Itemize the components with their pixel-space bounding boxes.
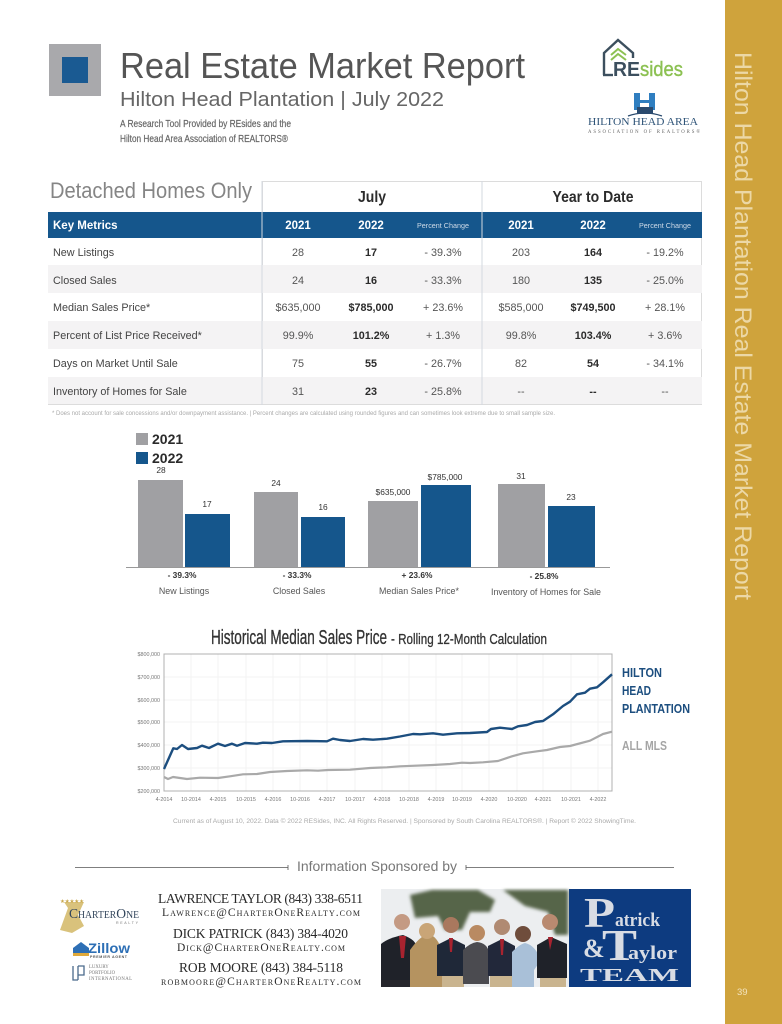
row: Percent of List Price Received: + 1.3% bbox=[426, 330, 460, 342]
group: Inventory: Inventory of Homes for Sale bbox=[491, 587, 601, 597]
group: Closed Sales bbox=[254, 478, 345, 596]
group: New Listings: 17 bbox=[202, 499, 212, 509]
contact: Lawrence Taylor: LAWRENCE TAYLOR (843) 338-6511 bbox=[158, 891, 363, 906]
logo: Hilton Head Area: ASSOCIATION OF REALTORS® bbox=[588, 129, 700, 135]
people bbox=[381, 914, 567, 987]
group: New Listings: 28 bbox=[156, 465, 166, 475]
row: New Listings: 164 bbox=[584, 247, 602, 259]
logo: CharterOne bbox=[60, 898, 139, 933]
x axis labels: 4-2019 bbox=[428, 797, 444, 803]
group headers: Year to Date bbox=[552, 189, 634, 206]
x axis labels: 4-2018 bbox=[374, 797, 390, 803]
row: Days on Market: 82 bbox=[515, 358, 527, 370]
row: Median Sales Price: $635,000 bbox=[275, 302, 321, 314]
team name panel: P bbox=[584, 891, 615, 937]
group headers: July bbox=[358, 189, 386, 206]
logo: CharterOne: ★★★★★ bbox=[60, 898, 84, 905]
group: Inventory: - 25.8% bbox=[530, 571, 559, 581]
y axis labels: $200,000 bbox=[138, 789, 160, 795]
group: Closed Sales: 16 bbox=[318, 502, 328, 512]
row: Closed Sales: 16 bbox=[365, 275, 377, 287]
team name panel bbox=[569, 889, 691, 987]
x axis labels: 4-2015 bbox=[210, 797, 226, 803]
group: Inventory: 31 bbox=[516, 471, 526, 481]
team name panel: & bbox=[583, 934, 605, 963]
x axis labels: 10-2021 bbox=[561, 797, 581, 803]
row: Inventory: 31 bbox=[292, 386, 304, 398]
team name panel: TEAM bbox=[580, 965, 679, 985]
row: Median Sales Price: $749,500 bbox=[570, 302, 616, 314]
row: Median Sales Price: Median Sales Price* bbox=[53, 302, 151, 314]
y axis labels: $500,000 bbox=[138, 720, 160, 726]
group: Median Sales Price: $785,000 bbox=[428, 472, 463, 482]
row: Inventory: 23 bbox=[365, 386, 377, 398]
header row: 2022 bbox=[358, 220, 384, 232]
row: New Listings: - 39.3% bbox=[424, 247, 462, 259]
row: Percent of List Price Received: + 3.6% bbox=[648, 330, 682, 342]
row: Closed Sales: Closed Sales bbox=[53, 275, 117, 287]
row: Percent of List Price Received: 99.8% bbox=[506, 330, 537, 342]
contact details bbox=[158, 891, 363, 988]
group: Inventory: 23 bbox=[566, 492, 576, 502]
x axis labels: 4-2014 bbox=[156, 797, 172, 803]
group: Closed Sales: 24 bbox=[271, 478, 281, 488]
line chart: historical median sales price bbox=[138, 652, 612, 803]
sidebar vertical title: Hilton Head Plantation Real Estate Market Report bbox=[729, 52, 756, 600]
row: Days on Market: - 26.7% bbox=[424, 358, 462, 370]
logo: Zillow: Zillow bbox=[88, 940, 130, 956]
contact: Rob Moore: ROB MOORE (843) 384-5118 bbox=[179, 960, 343, 975]
header row bbox=[53, 220, 691, 232]
legend label: Hilton Head Plantation bbox=[622, 666, 690, 716]
row: Percent of List Price Received: 99.9% bbox=[283, 330, 314, 342]
contact: Dick Patrick bbox=[173, 926, 348, 954]
group: Closed Sales: - 33.3% bbox=[283, 570, 312, 580]
intro text bbox=[120, 118, 291, 145]
table footnote: * Does not account for sale concessions and/or downpayment assistance. | Percent changes are calculated using rounded figures and can sometimes look extreme due to small sample size. bbox=[52, 410, 555, 417]
row: New Listings: 17 bbox=[365, 247, 377, 259]
logo: Luxury Portfolio International: INTERNATIONAL bbox=[89, 977, 132, 982]
logo: REsides: RE bbox=[613, 59, 640, 81]
row: New Listings: 203 bbox=[512, 247, 530, 259]
group: Median Sales Price: + 23.6% bbox=[402, 570, 433, 580]
header row: 2022 bbox=[580, 220, 606, 232]
x axis labels: 4-2020 bbox=[481, 797, 497, 803]
x axis labels: 10-2016 bbox=[290, 797, 310, 803]
line: All MLS bbox=[164, 732, 612, 779]
row: New Listings: New Listings bbox=[53, 247, 115, 259]
row: New Listings bbox=[53, 247, 684, 259]
group: Median Sales Price: $635,000 bbox=[376, 487, 411, 497]
row: Closed Sales: - 25.0% bbox=[646, 275, 684, 287]
legend label: Hilton Head Plantation: HEAD bbox=[622, 684, 651, 698]
team name panel: T bbox=[602, 921, 637, 970]
contact: Lawrence Taylor bbox=[158, 891, 363, 919]
y axis labels: $400,000 bbox=[138, 743, 160, 749]
legend label: All MLS: ALL MLS bbox=[622, 739, 667, 753]
logo: Hilton Head Area: HILTON HEAD AREA bbox=[588, 117, 699, 128]
row: Days on Market: 54 bbox=[587, 358, 599, 370]
row: Inventory: -- bbox=[661, 386, 669, 398]
row: Inventory: Inventory of Homes for Sale bbox=[53, 386, 187, 398]
subtitle: Hilton Head Plantation | July 2022 bbox=[120, 88, 444, 111]
row: Percent of List Price Received: Percent of List Price Received* bbox=[53, 330, 203, 342]
bar chart bbox=[126, 431, 610, 597]
contact: Dick Patrick: Dick@CharterOneRealty.com bbox=[177, 942, 345, 954]
x axis labels: 4-2022 bbox=[590, 797, 606, 803]
line: Hilton Head Plantation bbox=[164, 674, 612, 769]
legend: 2022 bbox=[152, 450, 183, 466]
icon: report square bbox=[49, 44, 101, 96]
contact: Rob Moore: robmoore@CharterOneRealty.com bbox=[161, 976, 361, 988]
title: Real Estate Market Report bbox=[120, 45, 525, 86]
row: Inventory: -- bbox=[517, 386, 525, 398]
group headers bbox=[358, 189, 634, 206]
row: Days on Market bbox=[53, 358, 684, 370]
x axis labels: 10-2019 bbox=[452, 797, 472, 803]
intro text: A Research Tool Provided by REsides and the bbox=[120, 118, 291, 130]
logo: Hilton Head Area bbox=[588, 93, 700, 135]
row: Inventory: -- bbox=[589, 386, 597, 398]
row: Closed Sales: 180 bbox=[512, 275, 530, 287]
legend label: Hilton Head Plantation: PLANTATION bbox=[622, 702, 690, 716]
team name panel: aylor bbox=[628, 943, 678, 964]
row: Closed Sales: - 33.3% bbox=[424, 275, 462, 287]
x axis labels: 10-2020 bbox=[507, 797, 527, 803]
group: New Listings: New Listings bbox=[159, 586, 210, 596]
palm trees bbox=[410, 890, 568, 935]
team name panel: atrick bbox=[615, 910, 660, 931]
row: Days on Market: Days on Market Until Sale bbox=[53, 358, 178, 370]
logo: Zillow: PREMIER AGENT bbox=[90, 955, 128, 959]
page number: 39 bbox=[737, 987, 748, 998]
contact: Rob Moore bbox=[161, 960, 361, 988]
row: Median Sales Price: + 28.1% bbox=[645, 302, 685, 314]
line chart title: Historical Median Sales Price bbox=[211, 627, 387, 649]
row: New Listings: 28 bbox=[292, 247, 304, 259]
photo: team portrait bbox=[381, 889, 691, 987]
table: key metrics bbox=[48, 181, 702, 405]
chart source note: Current as of August 10, 2022. Data © 2022 RESides, INC. All Rights Reserved. | Sponsored by South Carolina REALTORS®. | Report © 2022 ShowingTime. bbox=[173, 817, 636, 825]
y axis labels: $800,000 bbox=[138, 652, 160, 658]
x axis labels: 4-2016 bbox=[265, 797, 281, 803]
x axis labels: 10-2015 bbox=[236, 797, 256, 803]
row: Percent of List Price Received bbox=[53, 330, 682, 342]
row: Closed Sales bbox=[53, 275, 684, 287]
contact: Lawrence Taylor: Lawrence@CharterOneRealty.com bbox=[162, 907, 360, 919]
sponsor heading: Information Sponsored by bbox=[297, 858, 457, 874]
logo: REsides: sides bbox=[640, 59, 683, 81]
group: Median Sales Price bbox=[368, 472, 471, 596]
header row: 2021 bbox=[285, 220, 311, 232]
logo: CharterOne: CharterOne bbox=[69, 907, 139, 922]
y axis labels: $700,000 bbox=[138, 675, 160, 681]
group: New Listings: - 39.3% bbox=[168, 570, 197, 580]
row: Days on Market: 75 bbox=[292, 358, 304, 370]
logo: Luxury Portfolio International bbox=[73, 965, 132, 982]
logo: Luxury Portfolio International: LUXURY bbox=[89, 965, 109, 970]
header row: 2021 bbox=[508, 220, 534, 232]
row: Median Sales Price bbox=[53, 302, 685, 314]
group: New Listings bbox=[138, 465, 230, 596]
row: Median Sales Price: + 23.6% bbox=[423, 302, 463, 314]
row: New Listings: - 19.2% bbox=[646, 247, 684, 259]
row: Inventory bbox=[53, 386, 669, 398]
row: Percent of List Price Received: 101.2% bbox=[353, 330, 390, 342]
row: Percent of List Price Received: 103.4% bbox=[575, 330, 612, 342]
line chart title: - Rolling 12-Month Calculation bbox=[391, 631, 547, 648]
logo: CharterOne: REALTY bbox=[116, 921, 139, 925]
x axis labels: 4-2021 bbox=[535, 797, 551, 803]
logo: Zillow bbox=[73, 940, 130, 959]
heading: Detached Homes Only: Detached Homes Only bbox=[50, 178, 252, 203]
x axis labels: 10-2014 bbox=[181, 797, 201, 803]
logo: REsides bbox=[603, 40, 683, 81]
y axis labels bbox=[138, 652, 160, 795]
legend: 2021 bbox=[152, 431, 183, 447]
row: Closed Sales: 135 bbox=[584, 275, 602, 287]
row: Days on Market: 55 bbox=[365, 358, 377, 370]
group: Inventory bbox=[491, 471, 601, 597]
row: Median Sales Price: $785,000 bbox=[348, 302, 394, 314]
row: Inventory: - 25.8% bbox=[424, 386, 462, 398]
y axis labels: $600,000 bbox=[138, 698, 160, 704]
intro text: Hilton Head Area Association of REALTORS® bbox=[120, 133, 288, 145]
contact: Dick Patrick: DICK PATRICK (843) 384-4020 bbox=[173, 926, 348, 941]
row: Closed Sales: 24 bbox=[292, 275, 304, 287]
legend label: Hilton Head Plantation: HILTON bbox=[622, 666, 662, 680]
x axis labels: 10-2018 bbox=[399, 797, 419, 803]
x axis labels bbox=[156, 797, 606, 803]
group: Median Sales Price: Median Sales Price* bbox=[379, 586, 459, 596]
group: Closed Sales: Closed Sales bbox=[273, 586, 326, 596]
legend bbox=[136, 431, 183, 466]
logo: Luxury Portfolio International: PORTFOLIO bbox=[89, 971, 116, 976]
header row: Percent Change bbox=[639, 221, 691, 230]
header row: Key Metrics bbox=[53, 220, 118, 232]
x axis labels: 10-2017 bbox=[345, 797, 365, 803]
panel: gold sidebar bbox=[725, 0, 782, 1024]
row: Days on Market: - 34.1% bbox=[646, 358, 684, 370]
y axis labels: $300,000 bbox=[138, 766, 160, 772]
row: Median Sales Price: $585,000 bbox=[498, 302, 544, 314]
x axis labels: 4-2017 bbox=[319, 797, 335, 803]
header row: Percent Change bbox=[417, 221, 469, 230]
